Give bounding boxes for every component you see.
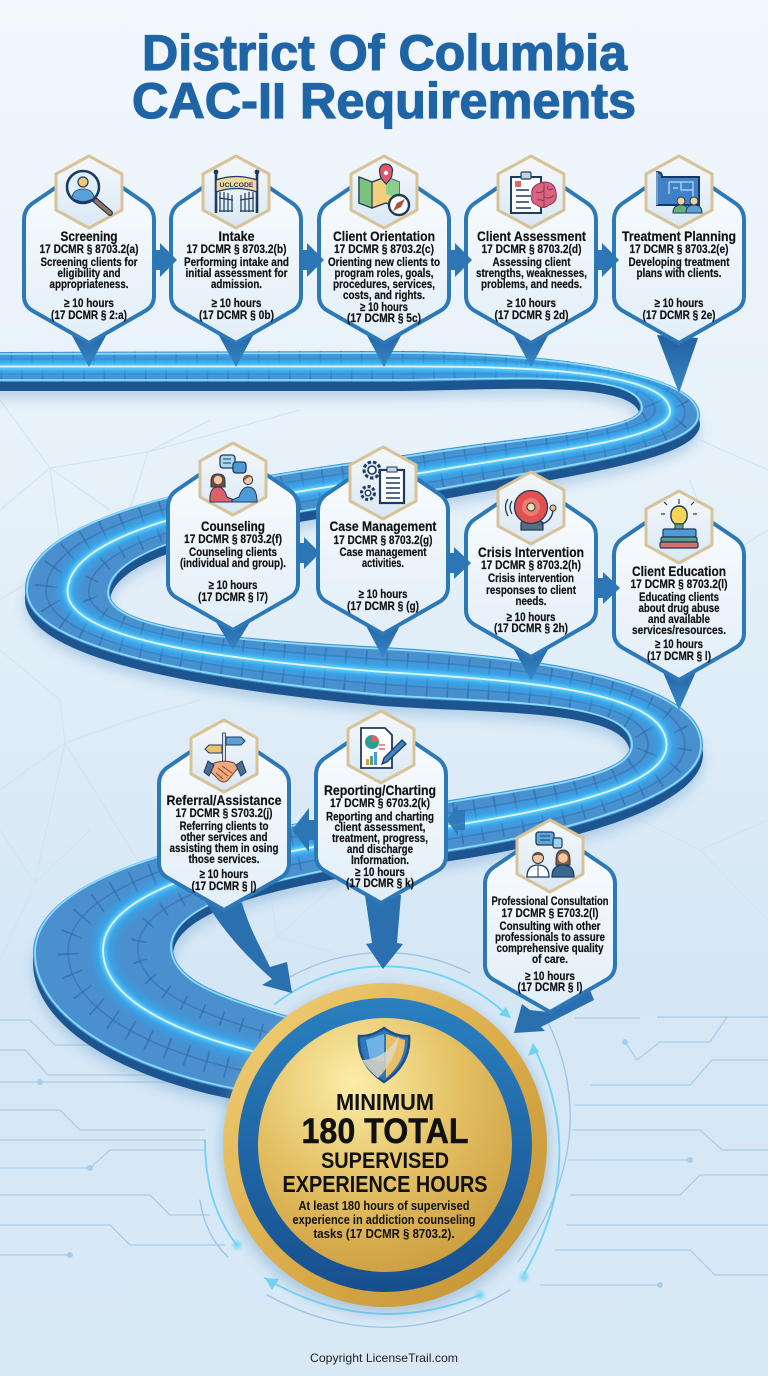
text block: Reporting/Charting <box>324 782 436 798</box>
icon: welcome gate <box>203 156 269 228</box>
hexagon panel <box>24 165 154 343</box>
footer copyright: Copyright LicenseTrail.com <box>310 1351 458 1365</box>
card: Treatment Planning <box>614 156 744 393</box>
icon: map, pin and compass <box>351 156 417 228</box>
text: medallion message: experience in addiction counseling <box>292 1212 476 1227</box>
text block <box>324 782 436 890</box>
text block: Orienting new clients to <box>328 255 440 269</box>
card: Client Assessment <box>466 156 596 367</box>
text block: client assessment, <box>334 820 426 834</box>
text block: and available <box>648 612 710 626</box>
hexagon panel <box>466 481 596 657</box>
text block: Case management <box>340 545 426 559</box>
hexagon panel <box>168 452 298 630</box>
text block: ≥ 10 hours <box>506 610 556 624</box>
text block: strengths, weaknesses, <box>476 266 587 280</box>
title: District Of Columbia <box>142 25 628 81</box>
icon: report and pen <box>348 711 414 783</box>
text block: (individual and group). <box>180 556 286 570</box>
text block <box>40 228 138 322</box>
text block: program roles, goals, <box>334 266 434 280</box>
text block: Referral/Assistance <box>166 792 282 808</box>
text block: professionals to assure <box>495 930 605 944</box>
text block: 17 DCMR § 8703.2(g) <box>334 533 432 547</box>
text block: Crisis Intervention <box>478 544 584 560</box>
pointer <box>511 644 551 680</box>
text block: comprehensive quality <box>496 941 604 955</box>
text block: Client Orientation <box>333 228 435 244</box>
arrow: to medallion <box>514 990 594 1033</box>
text block: ≥ 10 hours <box>360 300 408 314</box>
card: Client Education <box>614 491 744 710</box>
orbit arcs around the medallion <box>200 953 570 1327</box>
text block: ≥ 10 hours <box>212 296 262 310</box>
text block: (17 DCMR § 2e) <box>642 308 716 322</box>
text block: 17 DCMR § 8703.2(b) <box>186 242 286 256</box>
text block: 17 DCMR § 8703.2(d) <box>482 242 582 256</box>
text block: about drug abuse <box>638 601 720 615</box>
text block: Information. <box>351 853 409 867</box>
text block: Referring clients to <box>180 819 268 833</box>
hexagon panel <box>319 165 449 343</box>
text block: assisting them in osing <box>170 841 278 855</box>
card: Case Management <box>318 447 448 658</box>
text block: problems, and needs. <box>481 277 582 291</box>
text block: and discharge <box>347 842 413 856</box>
text block: other services and <box>180 830 268 844</box>
text block: Case Management <box>330 518 437 534</box>
card: Intake <box>171 156 301 367</box>
text block: 17 DCMR § 8703.2(h) <box>481 558 581 572</box>
text block <box>476 228 587 322</box>
text block: 17 DCMR § 8703.2(a) <box>40 242 138 256</box>
text block: Reporting and charting <box>326 810 434 824</box>
hexagon panel <box>485 829 615 1012</box>
text block: Counseling clients <box>189 545 277 559</box>
text block: (17 DCMR § l) <box>647 649 711 663</box>
card: Counseling <box>168 443 298 650</box>
brick road <box>0 351 703 1111</box>
text block: Consulting with other <box>500 919 601 933</box>
card: Referral/Assistance <box>159 720 292 993</box>
text block: ≥ 10 hours <box>655 637 703 651</box>
text block: admission. <box>211 277 262 291</box>
title <box>132 25 636 129</box>
text block: ≥ 10 hours <box>200 867 249 881</box>
icon: blueprint and two people <box>646 156 712 228</box>
hexagon panel <box>318 456 448 634</box>
text block: costs, and rights. <box>343 288 425 302</box>
text block: 17 DCMR § 8703.2(c) <box>334 242 434 256</box>
hexagon panel <box>171 165 301 343</box>
arrows between cards <box>153 243 620 852</box>
hexagon panel <box>614 500 744 680</box>
text block: (17 DCMR § (g) <box>347 599 419 613</box>
text block: 17 DCMR § 8703.2(l) <box>630 577 728 591</box>
text block <box>630 563 728 663</box>
text block: Intake <box>218 228 255 244</box>
text block: treatment, progress, <box>332 831 428 845</box>
text block: needs. <box>516 594 546 608</box>
text: medallion message <box>282 1089 488 1241</box>
pointer <box>216 330 256 367</box>
card: Crisis Intervention <box>466 472 596 680</box>
text block <box>328 228 440 325</box>
text block: Professional Consultation <box>492 894 608 908</box>
text block: procedures, services, <box>333 277 435 291</box>
text block: (17 DCMR § l7) <box>198 590 268 604</box>
text block: Counseling <box>201 518 265 534</box>
text: medallion message: MINIMUM <box>336 1089 434 1115</box>
text block <box>184 228 289 322</box>
pointer <box>69 330 109 367</box>
text: medallion message: SUPERVISED <box>321 1148 449 1173</box>
text: medallion message: At least 180 hours of supervised <box>298 1198 470 1213</box>
card: Screening <box>24 156 154 367</box>
pointer <box>363 620 403 658</box>
icon: welcome gate: UCLCODE <box>220 182 254 189</box>
icon: signpost and handshake <box>191 720 257 792</box>
title: CAC-II Requirements <box>132 73 636 129</box>
text block: 17 DCMR § 6703.2(k) <box>330 796 430 810</box>
text block: eligibility and <box>58 266 120 280</box>
text: medallion message: EXPERIENCE HOURS <box>282 1171 488 1197</box>
text block: (17 DCMR § 2d) <box>494 308 569 322</box>
text: medallion message: 180 TOTAL <box>302 1112 468 1151</box>
text block <box>622 228 736 322</box>
icon: alarm bell <box>498 472 564 544</box>
hexagon panel <box>159 729 289 910</box>
text block: (17 DCMR § 2h) <box>494 621 568 635</box>
medallion: minimum 180 total hours <box>220 983 550 1315</box>
text block: appropriateness. <box>50 277 128 291</box>
pointer <box>511 330 551 367</box>
pointer <box>657 335 698 393</box>
text block: ≥ 10 hours <box>208 578 258 592</box>
text block: ≥ 10 hours <box>654 296 704 310</box>
icon: clipboard and brain <box>498 156 564 228</box>
text block: plans with clients. <box>636 266 722 280</box>
text block: 17 DCMR § 8703.2(f) <box>184 532 282 546</box>
text block <box>478 544 584 635</box>
text block: ≥ 10 hours <box>355 865 405 879</box>
text block: activities. <box>362 556 404 570</box>
text block <box>166 792 282 893</box>
text block: Screening <box>60 228 118 244</box>
text block <box>330 518 437 613</box>
icon: light bulb on books <box>646 491 712 563</box>
icon: shield with road <box>359 1028 409 1082</box>
hexagon panel <box>316 720 446 903</box>
text block: (17 DCMR § |) <box>192 879 256 893</box>
text block: 17 DCMR § E703.2(l) <box>502 906 598 920</box>
text block: responses to client <box>486 583 576 597</box>
hexagon panel <box>466 165 596 343</box>
text block: Developing treatment <box>628 255 730 269</box>
text block: services/resources. <box>632 623 726 637</box>
card: Reporting/Charting <box>316 711 446 969</box>
text block: ≥ 10 hours <box>525 969 575 983</box>
card: Client Orientation <box>319 156 449 367</box>
text block <box>492 894 608 994</box>
hexagon panel <box>614 165 744 343</box>
icon: two people talking <box>200 443 266 515</box>
icon: gears and checklist <box>350 447 416 519</box>
card: Professional Consultation <box>485 820 615 1033</box>
pointer <box>364 330 404 367</box>
text block: Client Education <box>632 563 726 579</box>
arrow: down to medallion <box>365 895 403 969</box>
text block: (17 DCMR § 0b) <box>199 308 274 322</box>
text block: ≥ 10 hours <box>358 587 408 601</box>
text block: Screening clients for <box>40 255 138 269</box>
text block: Assessing client <box>492 255 570 269</box>
text block: ≥ 10 hours <box>507 296 556 310</box>
text block: of care. <box>532 952 568 966</box>
text block: (17 DCMR § l) <box>518 980 583 994</box>
text block: Performing intake and <box>184 255 289 269</box>
text block: initial assessment for <box>186 266 288 280</box>
pointer <box>213 617 253 650</box>
text block <box>180 518 286 604</box>
text block: (17 DCMR § 2:a) <box>51 308 127 322</box>
text block: Client Assessment <box>477 228 586 244</box>
text block: (17 DCMR § k) <box>346 876 414 890</box>
text: medallion message: tasks (17 DCMR § 8703.2). <box>314 1226 454 1241</box>
text block: 17 DCMR § 8703.2(e) <box>630 242 728 256</box>
pointer <box>660 665 699 710</box>
text block: Treatment Planning <box>622 228 736 244</box>
text block: Crisis intervention <box>488 571 574 585</box>
text block: ≥ 10 hours <box>64 296 114 310</box>
text block: those services. <box>188 852 260 866</box>
text block: Educating clients <box>639 590 719 604</box>
icon: doctor and colleague talking <box>517 820 583 892</box>
text block: (17 DCMR § 5c) <box>347 311 421 325</box>
arrow: curved to medallion <box>205 900 292 993</box>
icon: magnifier with person <box>56 156 122 228</box>
text block: 17 DCMR § S703.2(j) <box>176 806 272 820</box>
